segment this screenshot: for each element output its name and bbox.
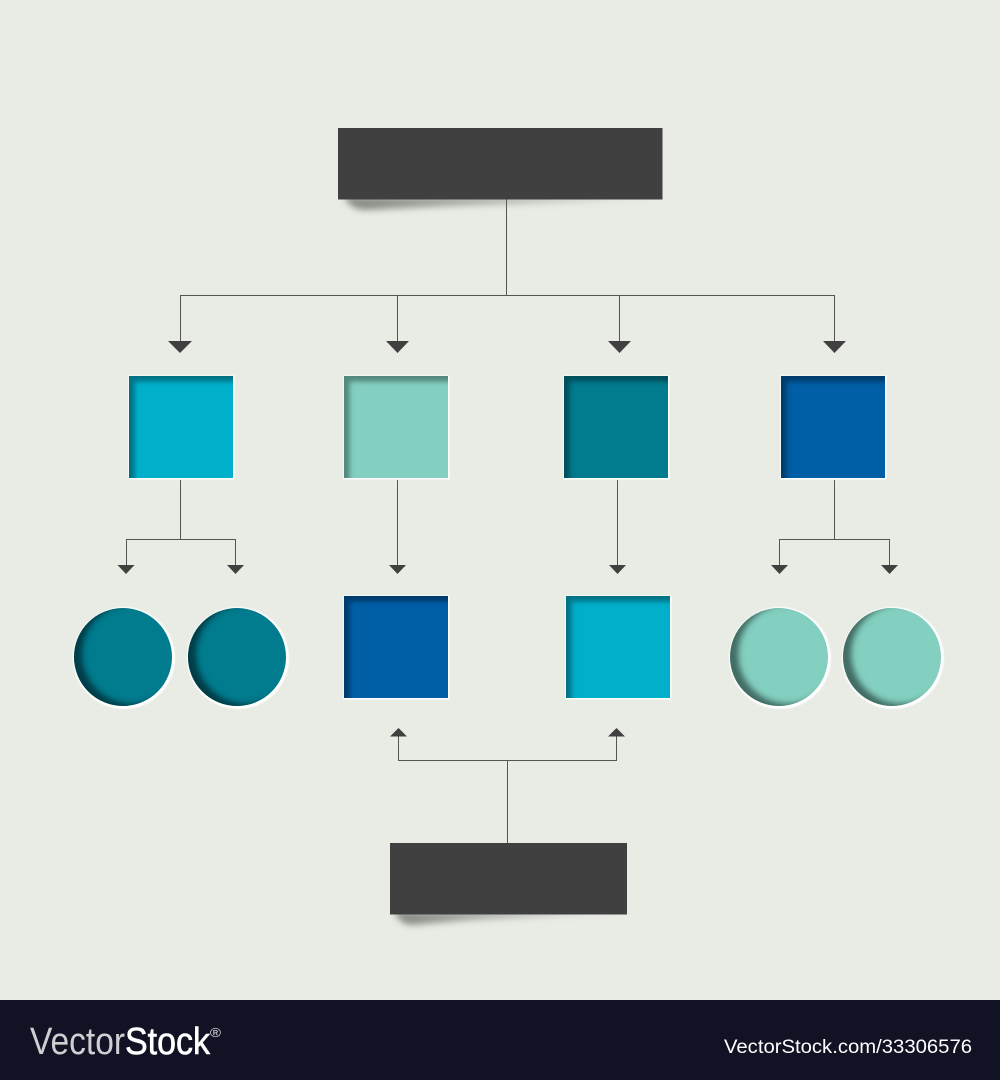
square: teal, row one <box>564 376 670 480</box>
connector: first square to circles <box>126 480 236 566</box>
square: blue, row one <box>780 376 886 480</box>
square: cyan, row one <box>128 376 234 480</box>
circle: mint right <box>842 607 944 709</box>
circle: teal right <box>187 607 289 709</box>
footer bar <box>0 1000 1000 1080</box>
connector: bottom box to lower squares <box>398 736 616 843</box>
square: mint, row one <box>344 376 450 480</box>
connector: second square to lower square <box>396 480 398 566</box>
circle: mint left <box>729 607 831 709</box>
arrowheads: pointing up <box>390 728 625 736</box>
connector: third square to lower square <box>616 480 618 566</box>
arrowheads: row two <box>118 565 898 574</box>
square: blue, row two <box>344 596 450 700</box>
footer logo: ® <box>210 1025 221 1040</box>
bottom box <box>390 843 627 925</box>
connector: fourth square to circles <box>780 480 890 566</box>
connector: top box to second row <box>180 199 834 342</box>
square: cyan, row two <box>566 596 672 700</box>
footer image id: VectorStock.com/33306576 <box>724 1037 972 1058</box>
footer logo: Vector <box>30 1021 125 1063</box>
circle: teal left <box>73 607 175 709</box>
arrowheads: row one <box>168 341 846 353</box>
top box <box>338 128 662 210</box>
footer logo <box>30 1021 221 1063</box>
footer logo: Stock <box>125 1021 211 1063</box>
